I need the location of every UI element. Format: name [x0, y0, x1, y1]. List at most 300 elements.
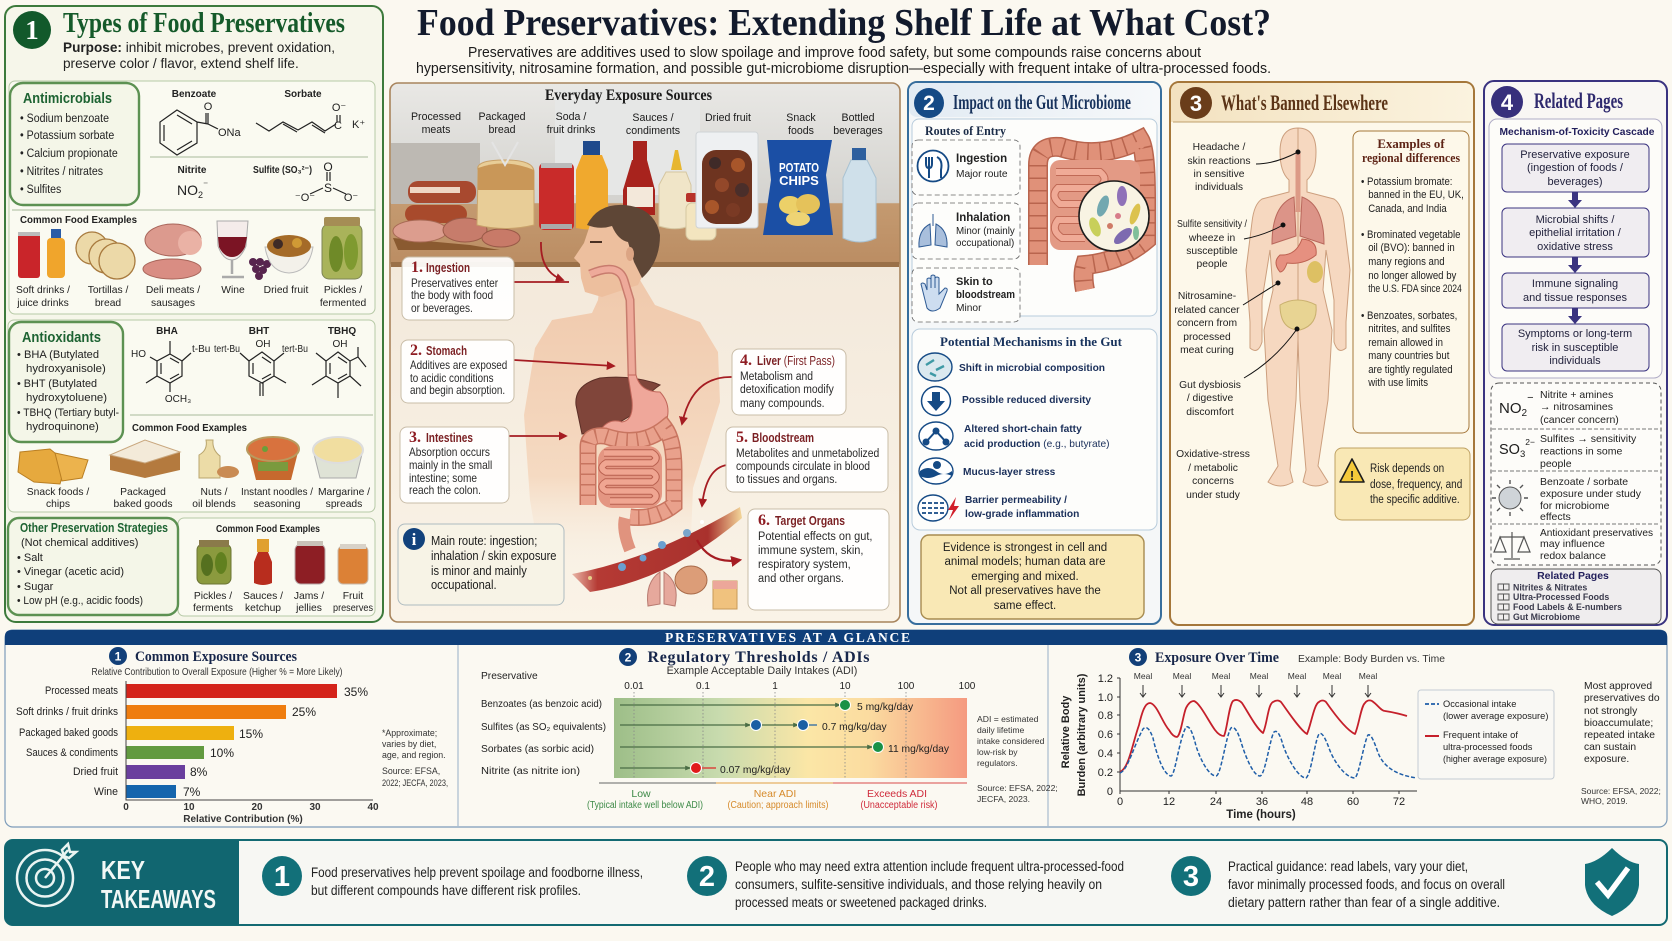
chemical structure: TBHQ: [312, 326, 366, 398]
line: frequent intake: [1120, 700, 1407, 772]
chart heading: Exposure Over Time: [1155, 650, 1279, 666]
cascade step 3: and tissue responses: [1523, 292, 1627, 304]
chemical structure: benzoate: [160, 89, 242, 155]
callout: target organs: immune system, skin,: [758, 543, 863, 557]
arrow: [1568, 308, 1582, 324]
x tick labels: 12: [1163, 796, 1175, 808]
chart note: Most approved: [1584, 681, 1652, 692]
formula: sulfite: 3: [1520, 449, 1525, 460]
callout: intestines: [400, 427, 509, 503]
callout: stomach: Additives are exposed: [410, 359, 507, 372]
icon: dried fruit bag: [696, 132, 758, 228]
tick labels: [624, 681, 976, 692]
icon: skin: [713, 581, 737, 609]
arrow: to liver: [682, 377, 732, 424]
chart note: *Approximate;: [382, 728, 437, 738]
icon: fruit preserves: [338, 544, 368, 584]
axis labels: [123, 802, 379, 825]
panel: gut microbiome: [908, 82, 1161, 624]
takeaway 3: Practical guidance: read labels, vary your diet,: [1228, 859, 1468, 874]
callout: main route: occupational.: [431, 577, 497, 592]
callout: ingestion: or beverages.: [411, 302, 473, 315]
symptom labels: Headache /: [1193, 142, 1245, 153]
callout: ingestion: 1.: [411, 259, 423, 276]
zone: near: Near ADI: [754, 788, 796, 800]
note: nitrite: Nitrite + amines: [1540, 389, 1613, 401]
stomach: [1276, 239, 1316, 272]
callout: ingestion: Ingestion: [426, 261, 470, 275]
box: regional differences: with use limits: [1367, 378, 1428, 389]
food labels: ferments: [193, 603, 233, 614]
box: antioxidants list: • TBHQ (Tertiary butyl-: [17, 407, 119, 419]
chemical structure: BHT: tert-Bu: [282, 344, 308, 355]
legend: (higher average exposure): [1443, 754, 1547, 764]
chart note: ADI = estimated: [977, 714, 1039, 724]
value labels: 15%: [239, 727, 263, 741]
cascade step 3: Immune signaling: [1532, 278, 1618, 290]
panel heading: Related Pages: [1534, 88, 1623, 113]
chart heading: 2: [625, 650, 632, 664]
box: antimicrobials list: • Sodium benzoate: [20, 112, 109, 125]
box: antioxidants list: hydroquinone): [26, 421, 99, 433]
source labels: Snack: [786, 112, 816, 124]
source labels: fruit drinks: [547, 124, 595, 136]
y tick labels: 1.2: [1098, 673, 1113, 685]
panel: related pages: [1484, 81, 1667, 625]
route: ingestion: Major route: [956, 169, 1008, 180]
callout: main route: is minor and mainly: [431, 563, 527, 578]
box: strategies list: • Salt: [17, 552, 43, 564]
meal markers: Meal: [1359, 671, 1377, 681]
chart note: exposure.: [1584, 754, 1629, 765]
y axis title: Relative Body: [1060, 695, 1072, 768]
food labels: Margarine /: [318, 487, 370, 498]
icon: potato chips bag: POTATO: [779, 160, 819, 175]
icon: wine: [217, 221, 271, 280]
callout: bloodstream: [726, 427, 888, 492]
callout: target organs: Target Organs: [775, 514, 845, 528]
arrow: to intestines: [509, 435, 566, 437]
leader lines: [1243, 150, 1300, 378]
chemical structure: BHA: BHA: [156, 326, 178, 337]
route: skin: Skin to: [956, 276, 993, 288]
food labels: Dried fruit: [264, 285, 308, 296]
head: [574, 205, 660, 297]
x tick labels: 72: [1393, 796, 1405, 808]
callout: main route: i: [412, 530, 417, 549]
x tick labels: [1117, 796, 1405, 808]
box: strategies list: • Low pH (e.g., acidic foods): [17, 595, 143, 607]
takeaway 2: [687, 856, 1124, 910]
box: antimicrobials list: • Calcium propionate: [20, 147, 118, 160]
cascade step 4: [1502, 324, 1649, 371]
box: toxicity cascade: Mechanism-of-Toxicity Cascade: [1500, 127, 1655, 138]
category labels: Processed meats: [45, 685, 119, 697]
takeaway 1: Food preservatives help prevent spoilage and foodborne illness,: [311, 865, 643, 880]
icon: tortillas: [76, 232, 135, 279]
note: antioxidant: may influence: [1540, 538, 1605, 550]
food labels: Pickles /: [324, 285, 362, 296]
note: sulfite: reactions in some: [1540, 446, 1622, 458]
takeaway 2: consumers, sulfite-sensitive individuals, and those relying heavily on: [735, 877, 1102, 892]
legend: [1418, 690, 1554, 779]
tick labels: 10: [839, 681, 851, 692]
callout: intestines: mainly in the small: [409, 459, 492, 472]
chemical: nitrite: 2: [198, 190, 203, 200]
illustration: intestines with microbes: [1038, 140, 1149, 290]
route: skin: Minor: [956, 303, 982, 314]
callout: stomach: and begin absorption.: [410, 384, 505, 397]
callout: liver: detoxification modify: [740, 384, 834, 396]
arrow: [1568, 257, 1582, 273]
arrow: [1568, 192, 1582, 208]
chart note: 2022; JECFA, 2023,: [382, 778, 448, 788]
cascade step 4: risk in susceptible: [1532, 342, 1618, 354]
callout: risk: Risk depends on: [1370, 462, 1444, 475]
source labels: Processed: [411, 111, 461, 123]
y tick labels: [1098, 673, 1113, 798]
chemical structure: sorbate: K⁺: [352, 119, 365, 131]
label: Possible reduced diversity: [962, 395, 1091, 406]
callout: liver: [732, 349, 846, 415]
food labels: Wine: [221, 285, 245, 296]
label: acid production (e.g., butyrate): [964, 439, 1110, 450]
y tick labels: 0: [1107, 786, 1113, 798]
symptom labels: concern from: [1177, 318, 1237, 329]
takeaway 1: but different compounds have different risk profiles.: [311, 883, 581, 898]
icon: jam: [295, 541, 325, 584]
stomach: [602, 375, 668, 444]
grid lines: [634, 692, 906, 778]
chemical structure: BHT: BHT: [249, 326, 269, 337]
icon: number 4: 4: [1501, 90, 1514, 115]
box: regional differences: • Brominated vegetable: [1361, 230, 1461, 241]
box: regional differences: • Benzoates, sorbates,: [1361, 311, 1457, 322]
subpanel: antimicrobial structures and foods: [9, 81, 375, 314]
box: antioxidants list: hydroxytoluene): [26, 392, 107, 404]
chemical: nitrite: ⁻: [203, 180, 208, 191]
note: nitrite: → nitrosamines: [1540, 401, 1613, 413]
chemical structure: BHA: [131, 326, 210, 405]
chart: exposure over time: [1060, 648, 1661, 821]
callout: target organs: [748, 509, 889, 610]
y tick labels: 0.8: [1098, 710, 1113, 722]
title: Food Preservatives: Extending Shelf Life at What Cost?: [417, 2, 1271, 44]
box: antioxidants list: • BHT (Butylated: [17, 378, 97, 390]
chart note: Source: EFSA, 2022;: [977, 783, 1058, 793]
icon: nuts and oil: [199, 440, 239, 478]
symptom labels: related cancer: [1174, 305, 1240, 316]
food labels: juice drinks: [16, 298, 69, 309]
tick labels: 0.01: [624, 681, 644, 692]
takeaway 3: [1171, 856, 1505, 910]
cascade step 2: Microbial shifts /: [1536, 214, 1615, 226]
source labels: Bottled: [842, 112, 875, 124]
box: regional differences: oil (BVO): banned in: [1368, 243, 1455, 254]
food labels: Fruit: [343, 591, 363, 602]
chart note: JECFA, 2023.: [977, 794, 1030, 804]
chemical: sulfite: O: [323, 160, 333, 174]
box: regional differences: the U.S. FDA since 2024: [1368, 284, 1462, 295]
symptom labels: under study: [1186, 490, 1241, 501]
source labels: foods: [788, 125, 814, 137]
note: antioxidant: Antioxidant preservatives: [1540, 527, 1653, 539]
source labels: Soda /: [556, 111, 586, 123]
cascade step 1: Preservative exposure: [1520, 149, 1630, 161]
chemical: sulfite: [253, 160, 358, 204]
box: strategies list: • Vinegar (acetic acid): [17, 566, 124, 578]
symptom labels: wheeze in: [1188, 233, 1235, 244]
icon: number 3: 3: [1190, 91, 1202, 116]
value labels: 35%: [344, 685, 368, 699]
axis labels: 10: [183, 802, 195, 813]
pelvis: [1280, 300, 1316, 330]
category labels: Dried fruit: [73, 766, 118, 778]
category labels: Wine: [94, 786, 118, 798]
subtitle: Preservatives are additives used to slow spoilage and improve food safety, but some compounds raise concerns about: [468, 45, 1201, 61]
x tick labels: 48: [1301, 796, 1313, 808]
subpanel: other preservation strategies: [8, 518, 375, 616]
chart heading: Common Exposure Sources: [135, 649, 297, 665]
axis labels: 0: [123, 802, 129, 813]
icon: mucus layer: [919, 458, 953, 484]
callout: stomach: 2.: [410, 342, 422, 359]
axis labels: Relative Contribution (%): [183, 814, 303, 825]
chart subtitle: Relative Contribution to Overall Exposure (Higher % = More Likely): [92, 667, 342, 678]
box: strategies list: • Sugar: [17, 581, 54, 593]
y axis title: [1060, 673, 1088, 796]
box: related pages list: Nitrites & Nitrates: [1513, 582, 1587, 592]
panel: exposure pathway illustration: [390, 83, 900, 622]
symptom labels: Nitrosamine-: [1178, 291, 1236, 302]
icon: barrier permeability: [918, 495, 959, 521]
box: related pages list: Ultra-Processed Foods: [1513, 592, 1609, 602]
icon: ketchup and condiments: [623, 141, 716, 240]
callout: intestines: Absorption occurs: [409, 446, 491, 459]
chemical structure: BHA: t-Bu: [192, 344, 210, 355]
source labels: condiments: [626, 125, 680, 137]
box: antimicrobials list: • Nitrites / nitrates: [20, 165, 103, 178]
row labels: Benzoates (as benzoic acid): [481, 699, 602, 710]
bars: [126, 684, 337, 798]
y axis title: Burden (arbitrary units): [1076, 673, 1088, 796]
chart note: not strongly: [1584, 706, 1638, 717]
icon: reduced diversity: [922, 386, 950, 416]
callout: risk: the specific additive.: [1370, 493, 1460, 506]
callout: bloodstream: Metabolites and unmetabolized: [736, 448, 879, 460]
note: sulfite: people: [1540, 458, 1572, 470]
box: regional differences: many countries but: [1368, 351, 1450, 362]
liver: [576, 377, 660, 434]
box: regional differences: are tightly regulated: [1368, 365, 1453, 376]
symptom labels: [1174, 142, 1250, 501]
cascade step 1: (ingestion of foods /: [1527, 162, 1624, 174]
chemical structure: benzoate: ONa: [218, 127, 242, 139]
meal markers: Meal: [1173, 671, 1191, 681]
callout: stomach: to acidic conditions: [410, 372, 494, 385]
callout: risk: [1335, 448, 1470, 520]
takeaway 2: 2: [699, 861, 715, 893]
box: potential mechanisms: Potential Mechanisms in the Gut: [940, 334, 1123, 349]
box: antimicrobials list: [10, 83, 139, 205]
callout: risk: dose, frequency, and: [1370, 478, 1462, 491]
value labels: 10%: [210, 746, 234, 760]
source labels: Sauces /: [632, 112, 674, 124]
food labels: fermented: [320, 298, 366, 309]
route: inhalation: occupational): [956, 238, 1014, 249]
icon: number 3: [1180, 87, 1212, 119]
icon: shield with check: [1585, 848, 1639, 916]
formula: sulfite: 2−: [1525, 437, 1535, 447]
line: occasional intake: [1120, 727, 1417, 778]
box: regional differences: banned in the EU, UK,: [1368, 190, 1464, 201]
chemical: nitrite: Nitrite: [178, 165, 207, 176]
cascade step 3: [1502, 273, 1649, 308]
box: regional differences: remain allowed in: [1368, 338, 1443, 349]
chemical structure: TBHQ: TBHQ: [328, 326, 356, 337]
icon: number 1: 1: [25, 15, 39, 45]
callout: bloodstream: compounds circulate in blood: [736, 461, 870, 473]
cascade step 2: [1502, 208, 1649, 257]
chart note: intake considered: [977, 736, 1045, 746]
panel: types of food preservatives: [5, 6, 383, 622]
icon: balance scale: [1494, 532, 1530, 559]
box: regional differences: [1353, 131, 1469, 433]
heading: common food examples: Common Food Examples: [20, 214, 137, 226]
zone: low: Low: [631, 788, 651, 800]
takeaway 1: [262, 856, 643, 898]
chart source: Source: EFSA, 2022;: [1581, 786, 1661, 796]
chemical structure: sorbate: C: [334, 120, 342, 132]
icon: instant noodles: [247, 437, 299, 480]
callout: main route: [398, 524, 564, 605]
box: regional differences: many regions and: [1368, 257, 1445, 268]
category labels: Packaged baked goods: [19, 727, 119, 739]
route: inhalation: [912, 203, 1020, 259]
callout: intestines: reach the colon.: [409, 484, 481, 497]
chart source: WHO, 2019.: [1581, 796, 1628, 806]
axes: [1117, 678, 1417, 794]
callout: ingestion: [402, 257, 514, 320]
symptom labels: / digestive: [1187, 393, 1233, 404]
food labels: Nuts /: [201, 487, 228, 498]
x tick labels: 60: [1347, 796, 1359, 808]
category labels: Soft drinks / fruit drinks: [16, 706, 119, 718]
callout: target organs: 6.: [758, 512, 770, 529]
illustration: human body with organs: [1246, 128, 1350, 486]
food labels: [193, 591, 373, 614]
chemical: sulfite: S: [324, 181, 332, 195]
chemical structure: BHA: OCH₃: [165, 394, 191, 405]
icon: ketchup: [254, 539, 272, 585]
symptom labels: meat curing: [1180, 345, 1234, 356]
panel heading: Types of Food Preservatives: [63, 7, 345, 39]
note: sulfite: Sulfites → sensitivity: [1540, 433, 1637, 445]
meal markers: Meal: [1323, 671, 1341, 681]
box: regional differences: no longer allowed by: [1368, 271, 1457, 282]
food labels: Pickles /: [194, 591, 232, 602]
zone: exceeds: (Unacceptable risk): [860, 800, 938, 811]
panel heading: What's Banned Elsewhere: [1221, 90, 1388, 115]
chart heading: Regulatory Thresholds / ADIs: [648, 649, 870, 666]
box: regional differences: nitrites, and sulfites: [1368, 324, 1450, 335]
value labels: 0.7 mg/kg/day: [822, 722, 888, 733]
source labels: [411, 111, 883, 137]
route: inhalation: Minor (mainly: [956, 226, 1015, 237]
note: nitrite: (cancer concern): [1540, 414, 1619, 426]
x tick labels: 24: [1210, 796, 1222, 808]
food labels: Packaged: [120, 487, 166, 498]
box: antimicrobials list: • Potassium sorbate: [20, 129, 114, 142]
value labels: 25%: [292, 705, 316, 719]
legend: (lower average exposure): [1443, 711, 1548, 721]
data points: [690, 700, 884, 774]
value labels: [720, 702, 950, 776]
chart note: Source: EFSA,: [382, 766, 440, 776]
formula: nitrite: −: [1527, 392, 1534, 404]
row labels: Nitrite (as nitrite ion): [481, 766, 580, 777]
chemical structure: BHT: [214, 326, 308, 396]
icon: soft drinks: [18, 229, 65, 278]
body silhouette: [1246, 128, 1350, 486]
callout: ingestion: the body with food: [411, 289, 493, 302]
chemical structure: BHA: HO: [131, 349, 146, 360]
callout: target organs: Potential effects on gut,: [758, 529, 872, 543]
icon: lungs: [648, 572, 676, 606]
callout: evidence: Evidence is strongest in cell and: [943, 542, 1107, 554]
source labels: bread: [488, 124, 516, 136]
lungs: [1272, 197, 1324, 244]
formula: nitrite: 2: [1522, 408, 1528, 419]
food labels: sausages: [151, 298, 195, 309]
icon: pickles jar: [322, 217, 362, 279]
box: regional differences: Canada, and India: [1368, 204, 1447, 215]
takeaway 1: 1: [274, 861, 290, 893]
food labels: Instant noodles /: [241, 487, 313, 498]
box: regional differences: regional differences: [1362, 151, 1460, 165]
chemical structure: sorbate: O⁻: [332, 102, 346, 114]
chart note: preservatives do: [1584, 693, 1660, 704]
chemical structure: BHT: tert-Bu: [214, 344, 240, 355]
subpanel: antioxidant structures and foods: [8, 320, 375, 512]
legend: Frequent intake of: [1443, 730, 1518, 740]
chemical: sulfite: O⁻: [344, 192, 358, 204]
icon: potato chips bag: [763, 140, 833, 235]
formula: nitrite: NO: [1499, 400, 1522, 417]
heading: TAKEAWAYS: [101, 884, 216, 914]
chemical structure: sorbate: Sorbate: [284, 89, 322, 100]
icon: microbial shift: [918, 353, 952, 381]
range lines: [620, 705, 872, 768]
zone: low: (Typical intake well below ADI): [587, 800, 703, 811]
callout: main route: inhalation / skin exposure: [431, 548, 557, 563]
callout: evidence: [921, 535, 1144, 619]
icon: number 2: 2: [923, 92, 935, 115]
icon: bread: [477, 142, 534, 228]
chart note: can sustain: [1584, 742, 1636, 753]
chart note: age, and region.: [382, 750, 446, 760]
takeaway 3: 3: [1183, 861, 1199, 893]
panel: key takeaways: [5, 840, 1667, 925]
formula: sulfite: SO: [1499, 442, 1520, 458]
banner heading: PRESERVATIVES AT A GLANCE: [665, 630, 910, 645]
callout: evidence: animal models; human data are: [944, 556, 1106, 568]
symptom labels: in sensitive: [1194, 169, 1245, 180]
box: antimicrobials list: Antimicrobials: [23, 90, 112, 107]
heading: common food examples: Common Food Examples: [132, 422, 247, 434]
heading: common food examples: Common Food Examples: [216, 524, 320, 535]
chart note: varies by diet,: [382, 739, 436, 749]
